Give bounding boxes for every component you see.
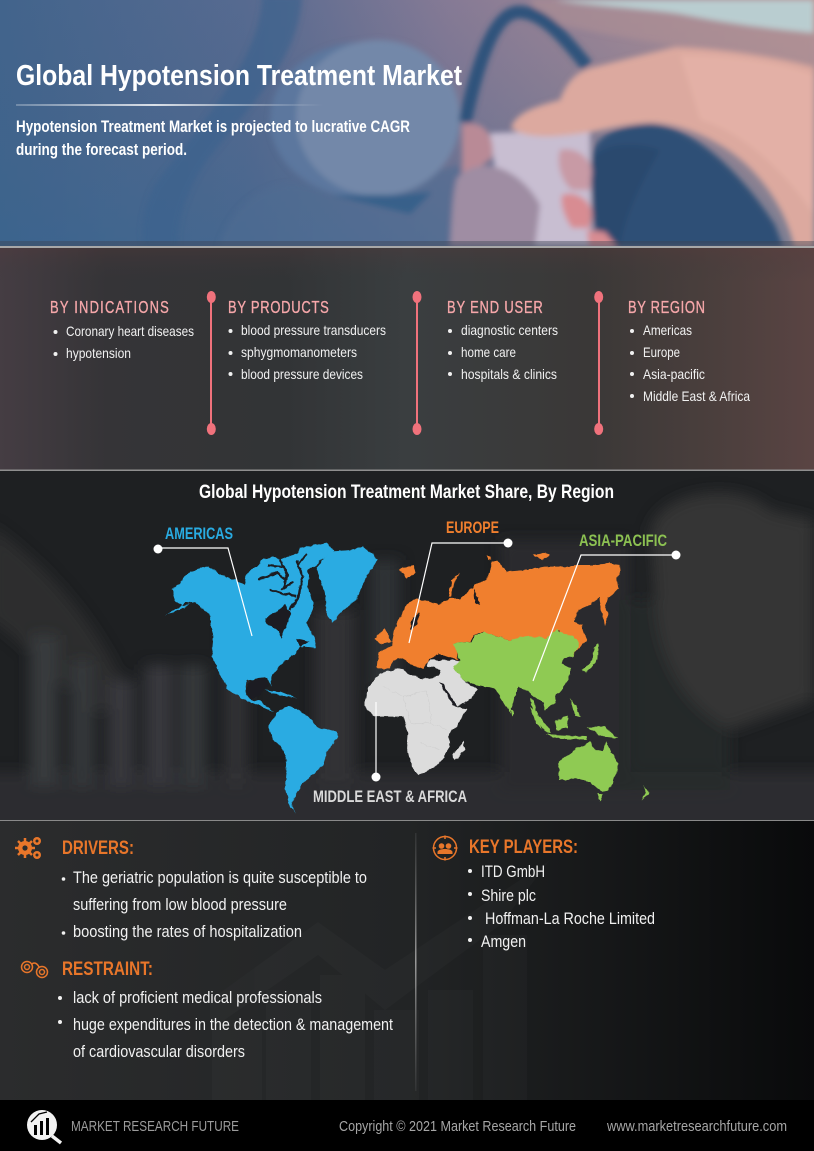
dark water cutouts <box>410 587 481 661</box>
key players list: Hoffman-La Roche Limited <box>485 909 655 928</box>
drivers list: boosting the rates of hospitalization <box>73 922 302 941</box>
brand name: MARKET RESEARCH FUTURE <box>71 1118 239 1135</box>
segment: by products: blood pressure transducers <box>241 322 386 338</box>
segment: by region: BY REGION <box>628 298 705 318</box>
heading: drivers: DRIVERS: <box>62 838 134 859</box>
watermark chart arrow <box>210 860 550 1100</box>
separator 1 <box>207 291 216 435</box>
title rule <box>16 104 324 106</box>
greenland <box>316 547 378 623</box>
segment: by region <box>628 298 750 404</box>
restraint list: huge expenditures in the detection & management <box>73 1015 393 1034</box>
segment: by region: Europe <box>643 344 680 360</box>
segment: by products: blood pressure devices <box>241 366 363 382</box>
panel: market segments <box>0 248 814 470</box>
segment: by products: sphygmomanometers <box>241 344 357 360</box>
key players list: ITD GmbH <box>481 862 545 881</box>
footer <box>0 1100 814 1151</box>
segment: by region: Middle East & Africa <box>643 388 750 404</box>
title: Global Hypotension Treatment Market <box>16 60 462 92</box>
icon: logo <box>27 1110 61 1143</box>
icon: handcuffs <box>22 962 48 978</box>
callout: europe: EUROPE <box>446 518 499 537</box>
segment: by end user: hospitals & clinics <box>461 366 557 382</box>
map title: Global Hypotension Treatment Market Share, By Region <box>199 482 614 503</box>
callout: middle east and africa <box>313 702 467 806</box>
region: americas <box>165 543 378 813</box>
key players list <box>468 862 655 951</box>
subtitle: during the forecast period. <box>16 140 187 159</box>
blurred background photo <box>0 493 814 832</box>
segment: by products <box>228 298 386 382</box>
drivers list: suffering from low blood pressure <box>73 895 287 914</box>
subtitle <box>16 117 410 159</box>
vertical divider <box>415 833 416 1091</box>
drivers list: The geriatric population is quite susceptible to <box>73 868 367 887</box>
copyright: Copyright © 2021 Market Research Future <box>339 1118 576 1135</box>
south america <box>268 707 338 813</box>
callout: asia-pacific: ASIA-PACIFIC <box>579 531 667 550</box>
panel: hero header <box>0 0 814 250</box>
segment: by region: Asia-pacific <box>643 366 705 382</box>
icon: key players <box>432 836 458 860</box>
region: middle east and africa <box>365 660 478 775</box>
subtitle: Hypotension Treatment Market is projected to lucrative CAGR <box>16 117 410 136</box>
segment: by indications: hypotension <box>66 345 131 361</box>
world map <box>165 543 649 813</box>
callout: europe <box>409 518 512 643</box>
segment: by region: Americas <box>643 322 692 338</box>
dark water cutouts <box>245 603 310 700</box>
segment: by end user: BY END USER <box>447 298 543 318</box>
separator 2 <box>412 291 422 435</box>
key players list: Amgen <box>481 932 526 951</box>
panel: regional share map <box>0 471 814 832</box>
region: asia-pacific <box>453 629 649 802</box>
segment: by end user: home care <box>461 344 516 360</box>
separator 3 <box>594 291 603 435</box>
callout: middle east and africa: MIDDLE EAST & AFRICA <box>313 787 467 806</box>
callout: americas <box>154 524 252 636</box>
callout: asia-pacific <box>533 531 680 681</box>
callout: americas: AMERICAS <box>165 524 233 543</box>
heading: key players: KEY PLAYERS: <box>469 837 578 858</box>
restraint list: lack of proficient medical professionals <box>73 988 322 1007</box>
photo: blood pressure cuff and hand <box>142 0 814 250</box>
key players list: Shire plc <box>481 886 536 905</box>
heading: restraint: RESTRAINT: <box>62 959 153 980</box>
icon: gears <box>15 837 41 859</box>
segment: by indications <box>50 298 194 361</box>
website: www.marketresearchfuture.com <box>606 1118 787 1135</box>
segment: by indications: Coronary heart diseases <box>66 323 194 339</box>
panel: drivers, restraint and key players <box>0 821 814 1100</box>
segment: by indications: BY INDICATIONS <box>50 298 169 318</box>
segment: by products: BY PRODUCTS <box>228 298 329 318</box>
restraint list <box>58 988 393 1061</box>
segment: by end user <box>447 298 558 382</box>
segment: by end user: diagnostic centers <box>461 322 558 338</box>
region: europe and russia <box>375 553 621 668</box>
drivers list <box>62 868 367 941</box>
restraint list: of cardiovascular disorders <box>73 1042 245 1061</box>
